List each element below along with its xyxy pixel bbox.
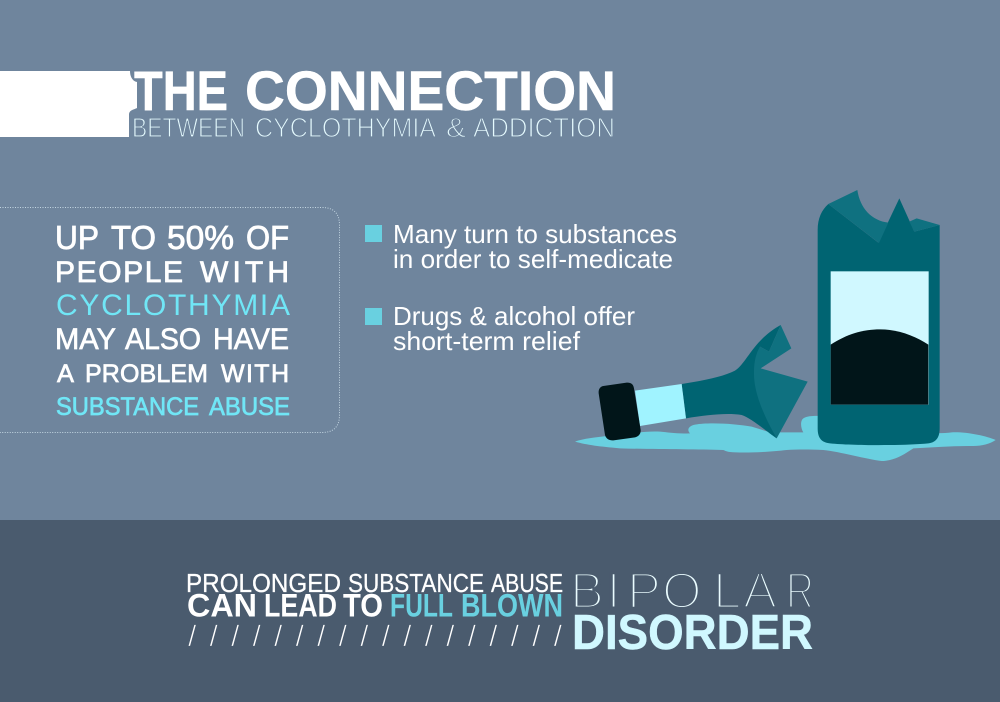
footer text left xyxy=(186,568,563,653)
statistic text: ABUSE xyxy=(209,393,290,421)
subheading: BETWEEN xyxy=(132,112,245,143)
white title tab xyxy=(0,71,137,137)
bullet list xyxy=(365,219,677,356)
statistic text: SUBSTANCE xyxy=(56,393,199,421)
footer text left: PROLONGED xyxy=(186,568,341,598)
icon: puddle xyxy=(575,416,996,461)
panel: statistic xyxy=(0,208,340,432)
footer text left: SUBSTANCE xyxy=(348,568,484,598)
statistic text: WITH xyxy=(221,360,289,388)
statistic text: OF xyxy=(246,219,289,256)
bullet 2: Drugs & alcohol offer xyxy=(393,301,635,331)
footer text left: / / / / / / / / / / / / / / / / / / xyxy=(188,620,563,653)
bullet 1: in order to self-medicate xyxy=(393,244,673,274)
background xyxy=(0,0,1000,520)
footer text right xyxy=(570,562,814,660)
statistic text: A xyxy=(57,360,74,388)
footer text left: ABUSE xyxy=(491,568,563,598)
footer text left: BLOWN xyxy=(461,588,563,624)
statistic text: UP xyxy=(55,219,99,256)
title block xyxy=(0,59,616,143)
heading: CONNECTION xyxy=(245,59,616,122)
subheading: ADDICTION xyxy=(473,112,615,143)
footer text right: BIPOLA xyxy=(570,562,777,619)
footer band xyxy=(0,520,1000,702)
statistic text xyxy=(55,219,290,421)
statistic text: HAVE xyxy=(213,323,289,356)
statistic text: CYCLOTHYMIA xyxy=(56,289,290,322)
subheading xyxy=(132,112,615,143)
statistic text: ALSO xyxy=(125,323,201,356)
statistic text: 50% xyxy=(167,219,234,256)
bottle label xyxy=(831,271,929,405)
bullet 1: Many turn to substances xyxy=(393,219,677,249)
footer text right: R xyxy=(786,562,814,619)
footer text left: CAN xyxy=(187,588,257,624)
subheading: & xyxy=(446,112,466,143)
statistic text: TO xyxy=(111,219,156,256)
bullet 2: short-term relief xyxy=(393,326,581,356)
illustration: broken bottles and spill xyxy=(575,190,996,461)
statistic text: MAY xyxy=(55,323,116,356)
liquid xyxy=(831,329,928,405)
heading: THE xyxy=(134,59,228,122)
icon: standing bottle xyxy=(818,190,940,445)
bullet 2 xyxy=(365,301,635,356)
statistic text: PROBLEM xyxy=(85,360,208,388)
dotted panel border xyxy=(0,208,340,432)
statistic text: PEOPLE xyxy=(55,256,183,289)
icon: broken bottle xyxy=(599,325,808,440)
footer text left: FULL xyxy=(390,588,453,624)
footer text left: LEAD xyxy=(264,588,337,624)
bullet 1 xyxy=(365,219,677,274)
footer text left: TO xyxy=(343,588,383,624)
statistic text: WITH xyxy=(200,256,289,289)
footer text right: DISORDER xyxy=(572,606,813,660)
subheading: CYCLOTHYMIA xyxy=(255,112,436,143)
footer message xyxy=(186,562,814,660)
